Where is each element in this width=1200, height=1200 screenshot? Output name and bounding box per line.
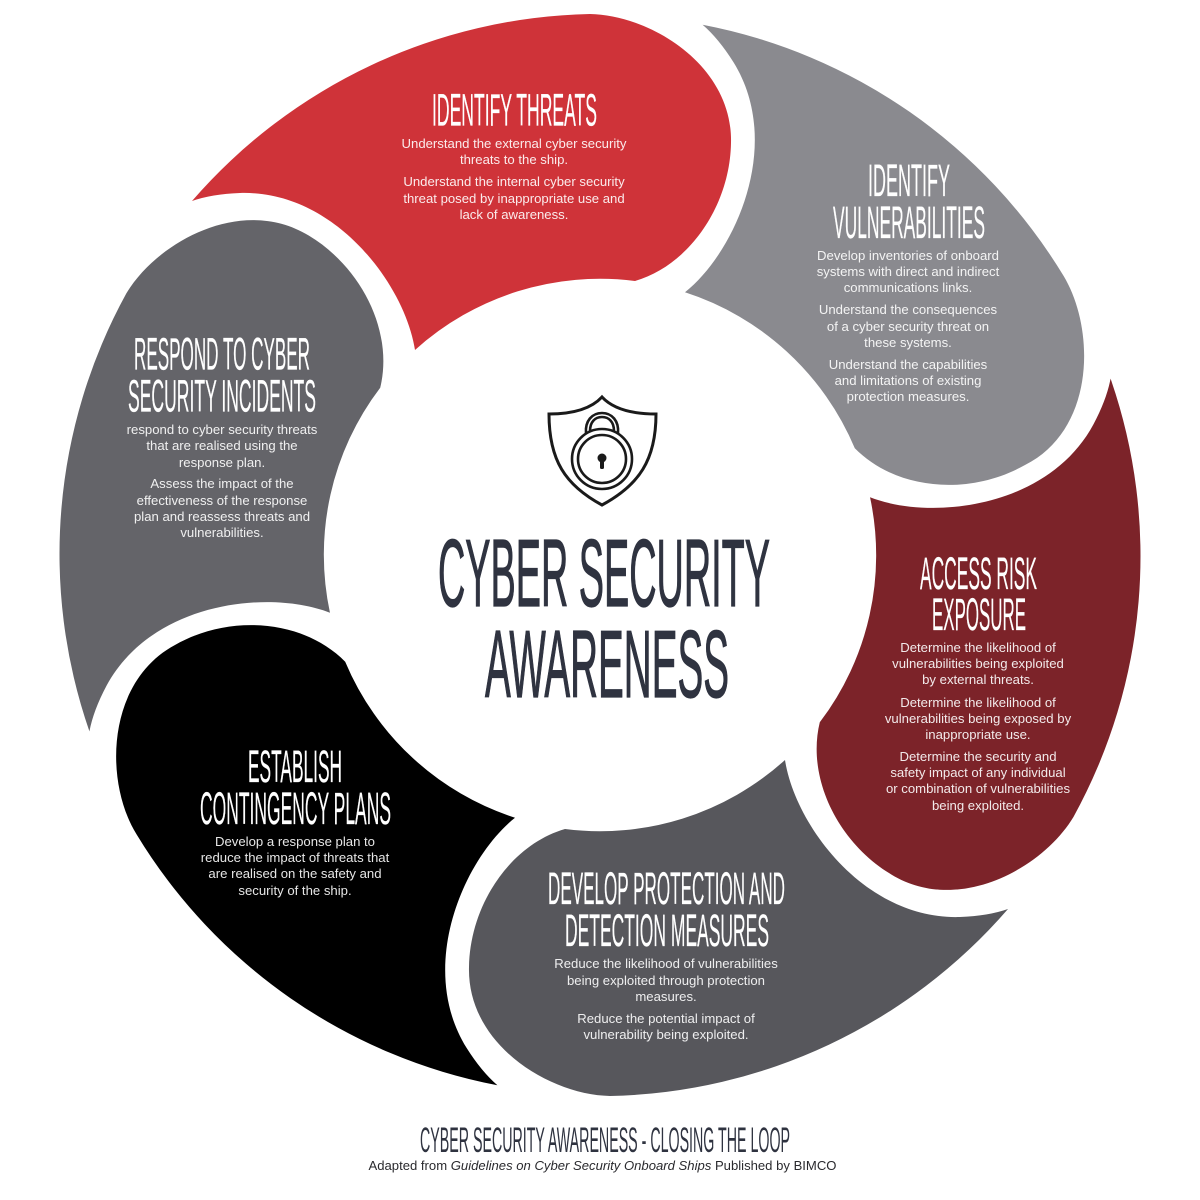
heading: access risk exposure <box>920 548 1037 640</box>
text: establish contingency plans description: are realised on the safety and <box>208 866 382 881</box>
text: develop protection description: being exploited through protection <box>567 973 765 988</box>
text: identify vulnerabilities description: Understand the capabilities <box>829 357 988 372</box>
heading: identify vulnerabilities <box>833 155 985 248</box>
panel: develop protection and detection measures: DEVELOP PROTECTION AND <box>548 863 785 914</box>
panel: identify threats <box>192 14 731 350</box>
text: respond description: respond to cyber security threats <box>127 422 318 437</box>
text: identify threats description: Understand the internal cyber security <box>403 174 625 189</box>
heading: respond to cyber security incidents <box>128 328 316 422</box>
text: establish contingency plans description: reduce the impact of threats that <box>201 850 390 865</box>
panel: access risk exposure: EXPOSURE <box>932 589 1026 640</box>
panel: respond to cyber security incidents: RESPOND TO CYBER <box>134 328 310 380</box>
text: identify threats description: lack of awareness. <box>460 207 568 222</box>
text: respond description: vulnerabilities. <box>180 525 264 540</box>
text: identify vulnerabilities description: Understand the consequences <box>819 302 998 317</box>
text: respond description: Assess the impact of the <box>150 476 294 491</box>
panel: establish contingency plans <box>116 625 515 1085</box>
panel: develop protection and detection measures: DETECTION MEASURES <box>565 905 769 956</box>
text: develop protection description: measures. <box>635 989 697 1004</box>
text: respond description <box>127 422 318 540</box>
text: access risk exposure description: inappropriate use. <box>925 727 1031 742</box>
text: access risk exposure description: vulnerabilities being exposed by <box>885 711 1072 726</box>
heading: develop protection and detection measures <box>548 863 785 956</box>
panel: identify vulnerabilities <box>685 25 1084 485</box>
panel: develop protection and detection measures <box>469 760 1008 1096</box>
text: respond description: plan and reassess threats and <box>134 509 310 524</box>
text: AWARENESS <box>485 611 729 718</box>
heading: identify vulnerabilities: IDENTIFY <box>868 155 950 206</box>
text: identify vulnerabilities description: of a cyber security threat on <box>827 319 989 334</box>
text: respond description: response plan. <box>179 455 265 470</box>
panel: respond to cyber security incidents <box>0 171 488 806</box>
text: establish contingency plans description: security of the ship. <box>238 883 352 898</box>
text: access risk exposure description: Determine the security and <box>899 749 1057 764</box>
icon: shield with padlock <box>549 397 656 505</box>
text: access risk exposure description: or combination of vulnerabilities <box>886 781 1070 796</box>
text: access risk exposure description <box>885 640 1072 813</box>
text: respond description: effectiveness of the response <box>137 493 307 508</box>
text: access risk exposure description: Determine the likelihood of <box>900 695 1056 710</box>
text: identify vulnerabilities description: and limitations of existing <box>835 373 981 388</box>
text: identify vulnerabilities description <box>817 248 1000 404</box>
text: develop protection description: vulnerability being exploited. <box>583 1027 749 1042</box>
panel: establish contingency plans: CONTINGENCY PLANS <box>200 783 391 834</box>
text: identify threats description: Understand the external cyber security <box>402 136 627 151</box>
heading: establish contingency plans <box>200 741 391 834</box>
text: access risk exposure description: vulnerabilities being exploited <box>892 656 1064 671</box>
text: develop protection description: Reduce the potential impact of <box>577 1011 755 1026</box>
text: respond description: that are realised using the <box>146 438 298 453</box>
text: access risk exposure description: Determine the likelihood of <box>900 640 1056 655</box>
text: identify threats description: threats to the ship. <box>460 152 568 167</box>
text: access risk exposure description: safety impact of any individual <box>890 765 1066 780</box>
text: identify threats description <box>402 136 627 222</box>
text: establish contingency plans description <box>201 834 390 898</box>
panel: identify threats: IDENTIFY THREATS <box>432 84 597 136</box>
text: access risk exposure description: being exploited. <box>932 798 1024 813</box>
text: identify vulnerabilities description: these systems. <box>864 335 952 350</box>
text: establish contingency plans description: Develop a response plan to <box>215 834 375 849</box>
heading: establish contingency plans: ESTABLISH <box>248 741 342 792</box>
text: access risk exposure description: by external threats. <box>922 672 1034 687</box>
text: develop protection description <box>554 956 778 1042</box>
text: identify threats description: threat posed by inappropriate use and <box>403 191 625 206</box>
text: identify vulnerabilities description: Develop inventories of onboard <box>817 248 999 263</box>
text: identify vulnerabilities description: communications links. <box>844 280 972 295</box>
text: develop protection description: Reduce the likelihood of vulnerabilities <box>554 956 778 971</box>
footer source credit: Adapted from Guidelines on Cyber Security Onboard Ships Published by BIMCO <box>369 1158 836 1173</box>
panel: respond to cyber security incidents: SECURITY INCIDENTS <box>128 370 316 422</box>
title: cyber security awareness <box>438 520 770 718</box>
text: identify vulnerabilities description: protection measures. <box>847 389 969 404</box>
text: identify vulnerabilities description: systems with direct and indirect <box>817 264 1000 279</box>
panel: access risk exposure <box>712 304 1200 939</box>
